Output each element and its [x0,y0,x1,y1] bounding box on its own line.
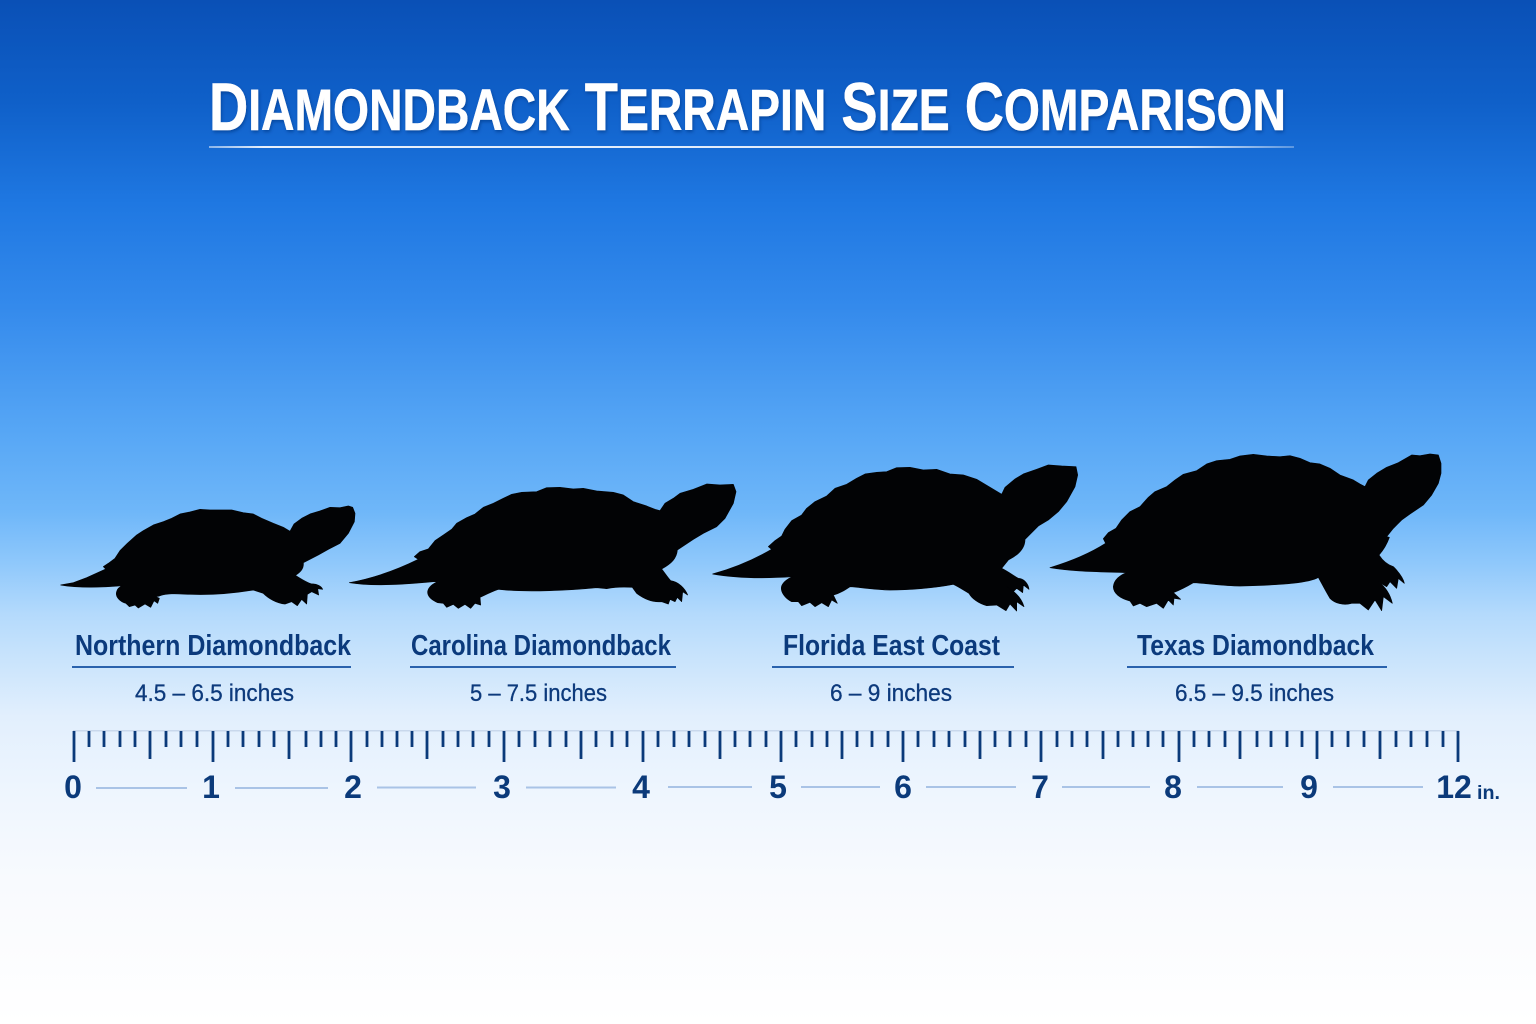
label: texas diamondback: Texas Diamondback [1137,630,1375,662]
silhouette: carolina diamondback terrapin [349,484,736,608]
label: texas diamondback [1127,630,1387,707]
label: texas diamondback: 6.5 – 9.5 inches [1175,680,1334,707]
ruler numbers: 8 [1164,769,1182,805]
label: florida east coast: Florida East Coast [783,630,1000,662]
ruler connector lines [96,787,1423,788]
ruler numbers: 7 [1031,769,1049,805]
title: DIAMONDBACK TERRAPIN SIZE COMPARISON [209,69,1286,145]
label: carolina diamondback: Carolina Diamondback [411,630,672,662]
ruler numbers [64,769,1472,805]
ruler unit: in. [1477,783,1500,804]
label: northern diamondback: Northern Diamondback [75,630,352,662]
ruler ticks [73,730,1459,762]
label: florida east coast: 6 – 9 inches [830,680,952,707]
label: northern diamondback [72,630,352,707]
label: northern diamondback: 4.5 – 6.5 inches [135,680,294,707]
ruler numbers: 12 [1436,769,1472,805]
ruler numbers: 9 [1300,769,1318,805]
ruler numbers: 5 [769,769,787,805]
ruler numbers: 6 [894,769,912,805]
label: carolina diamondback: 5 – 7.5 inches [470,680,607,707]
ruler numbers: 3 [493,769,511,805]
ruler numbers: 2 [344,769,362,805]
ruler numbers: 1 [202,769,220,805]
silhouette: florida east coast terrapin [713,465,1078,611]
ruler numbers: 0 [64,769,82,805]
ruler numbers: 4 [632,769,650,805]
silhouette: northern diamondback terrapin [61,506,355,608]
label: florida east coast [772,630,1014,707]
ruler [64,730,1500,805]
label: carolina diamondback [410,630,676,707]
silhouette: texas diamondback terrapin [1050,454,1441,611]
